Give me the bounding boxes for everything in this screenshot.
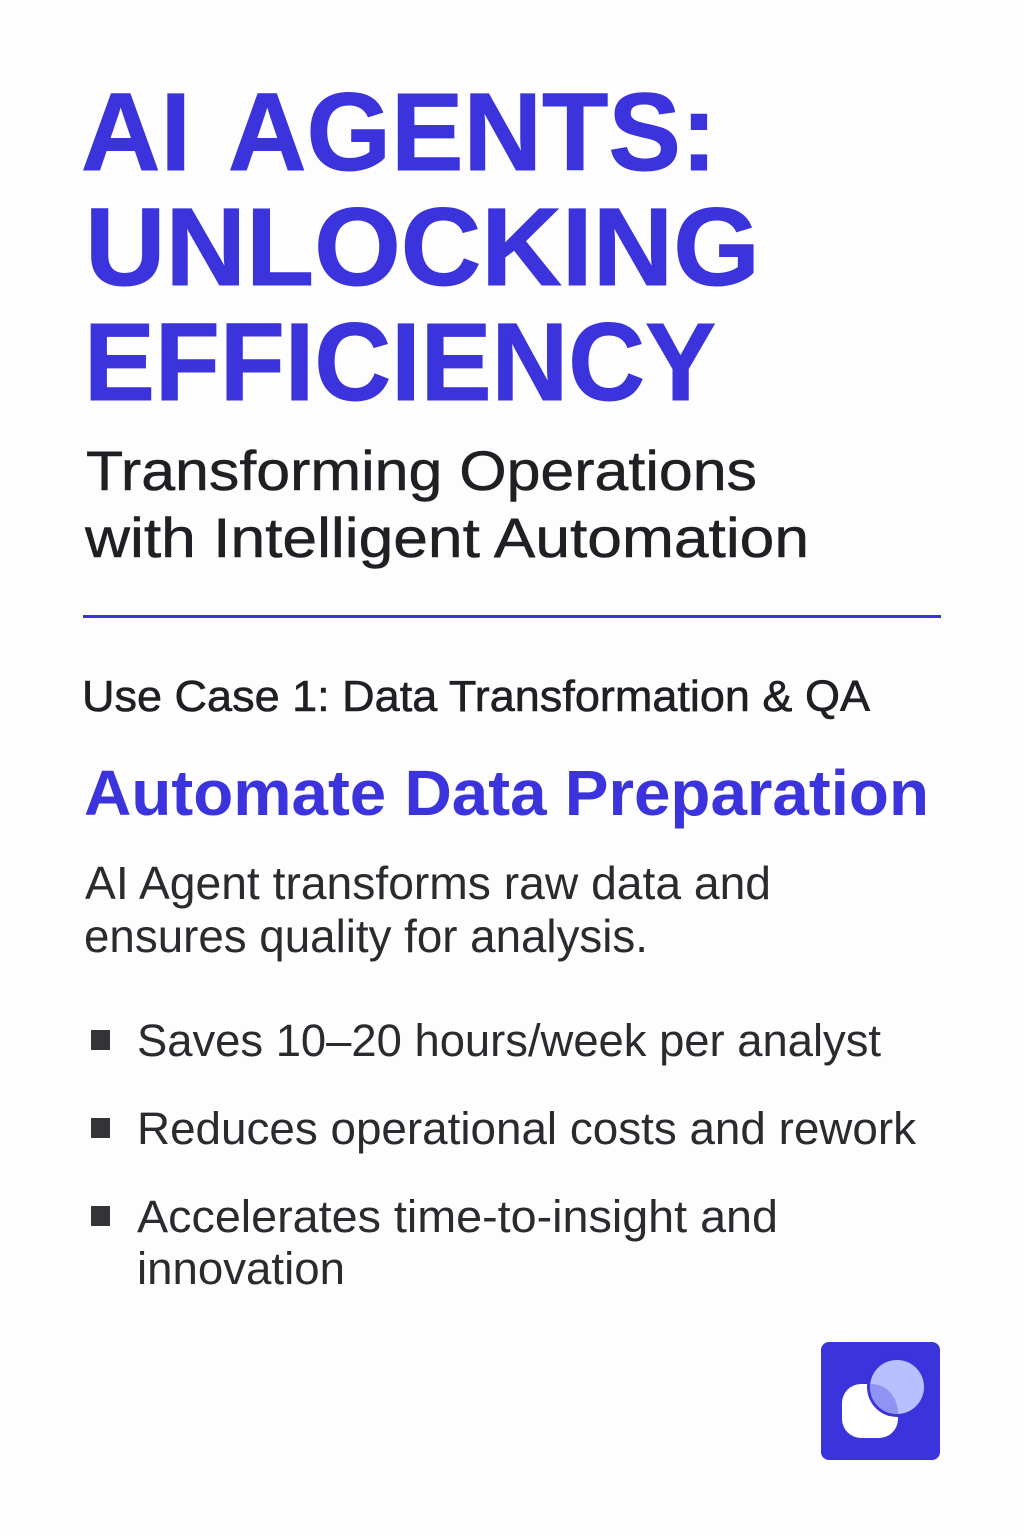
bullet: saves hours: Saves 10–20 hours/week per analyst	[137, 1015, 882, 1066]
subtitle	[84, 439, 809, 569]
bullet: reduces costs: Reduces operational costs and rework	[137, 1103, 917, 1154]
description	[84, 857, 771, 962]
use case label: Use Case 1: Data Transformation & QA	[82, 672, 871, 721]
icon: logo	[821, 1342, 940, 1460]
bullet: accelerates insight: Accelerates time-to-insight and	[137, 1191, 778, 1242]
subtitle: Transforming Operations	[86, 439, 757, 502]
title: UNLOCKING	[85, 186, 760, 309]
title	[81, 71, 760, 424]
description: AI Agent transforms raw data and	[85, 857, 771, 909]
subtitle: with Intelligent Automation	[84, 506, 809, 569]
title: EFFICIENCY	[84, 301, 716, 424]
section heading: Automate Data Preparation	[84, 757, 929, 829]
bullet: accelerates insight	[91, 1191, 778, 1294]
title: AGENTS:	[228, 71, 717, 194]
benefits list	[91, 1015, 917, 1294]
title: AI	[81, 71, 191, 194]
bullet: accelerates insight: innovation	[137, 1243, 345, 1294]
description: ensures quality for analysis.	[84, 910, 648, 962]
